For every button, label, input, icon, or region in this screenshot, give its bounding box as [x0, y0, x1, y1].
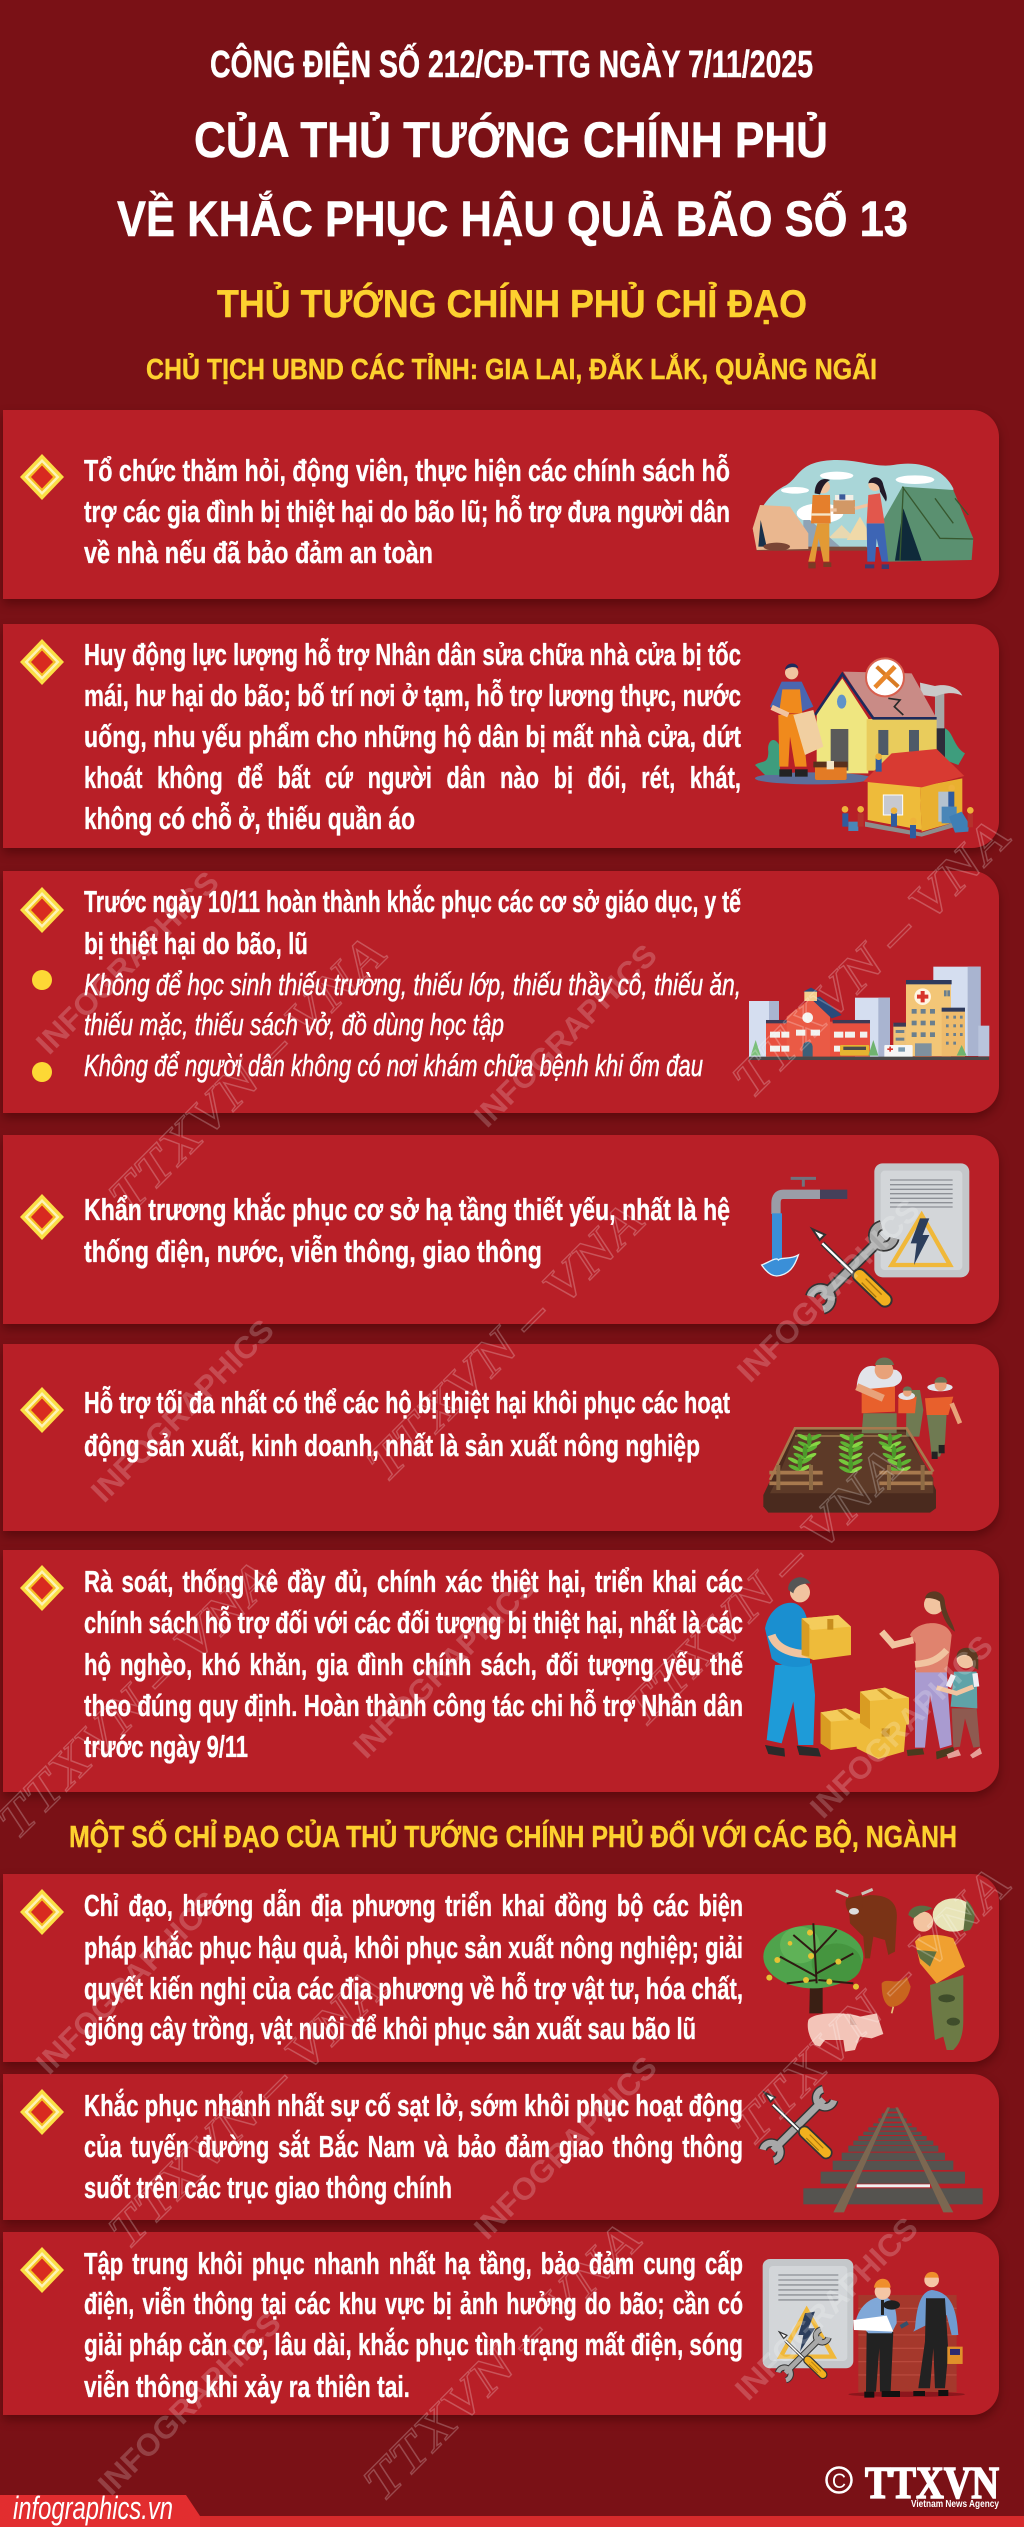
icon: tools and railway track [763, 2089, 983, 2212]
panel background [3, 410, 999, 599]
title line: storm recovery: VỀ KHẮC PHỤC HẬU QUẢ BÃO SỐ 13 [117, 190, 908, 247]
watermarks: TTXVN – VNA [351, 2210, 652, 2511]
text block: Không để người dân không có nơi khám chữa bệnh khi ốm đau [84, 1048, 703, 1083]
panel background [3, 624, 999, 848]
icon: soldiers and crop field [763, 1357, 960, 1513]
watermarks: INFOGRAPHICS [84, 1312, 281, 1509]
logo wordmark: TTXVN [865, 2457, 999, 2508]
watermarks: INFOGRAPHICS [346, 1568, 543, 1765]
panel background [3, 2232, 999, 2415]
title line: prime minister: CỦA THỦ TƯỚNG CHÍNH PHỦ [194, 111, 828, 168]
icon: relief worker, family and boxes [765, 1577, 982, 1759]
text block: trợ các gia đình bị thiệt hại do bão lũ; hỗ trợ đưa người dân [84, 494, 730, 529]
icon: diamond bullet [20, 1387, 64, 1433]
watermarks: TTXVN – VNA [96, 1958, 397, 2259]
icon: copyright circle: C [832, 2470, 846, 2493]
text block: suốt trên các trục giao thông chính [84, 2170, 452, 2205]
text block: về nhà nếu đã bảo đảm an toàn [84, 535, 433, 570]
text block: viễn thông khi xảy ra thiên tai. [84, 2369, 410, 2404]
text block: giải pháp căn cơ, lâu dài, khắc phục tình trạng mất điện, sóng [84, 2326, 743, 2362]
panel background [3, 1135, 999, 1324]
text block [84, 1564, 744, 1764]
panel: review damage and support payments [3, 1550, 999, 1792]
text block: Tổ chức thăm hỏi, động viên, thực hiện các chính sách hỗ [84, 453, 730, 488]
watermarks: TTXVN – VNA [720, 1855, 1021, 2156]
icon: tap, tools and electric box [762, 1163, 969, 1309]
text block [84, 1191, 730, 1269]
text block: trước ngày 9/11 [84, 1729, 248, 1764]
text block: của tuyến đường sắt Bắc Nam và bảo đảm giao thông thông [84, 2128, 743, 2164]
text block: chính sách hỗ trợ đối với các đối tượng bị thiệt hại, nhất là các [84, 1605, 743, 1640]
watermarks: INFOGRAPHICS [467, 937, 664, 1134]
watermarks: INFOGRAPHICS [730, 1192, 927, 1389]
text block [84, 637, 741, 836]
text block: quyết kiến nghị của các địa phương về hỗ trợ vật tư, hóa chất, [84, 1971, 743, 2006]
text block: bị thiệt hại do bão, lũ [84, 926, 308, 961]
panel background [3, 1344, 999, 1531]
watermarks: TTXVN – VNA [612, 1436, 913, 1737]
subheading: provincial chairmen: CHỦ TỊCH UBND CÁC TỈNH: GIA LAI, ĐẮK LẮK, QUẢNG NGÃI [146, 352, 877, 386]
panel background [3, 2074, 999, 2220]
text block: pháp khắc phục hậu quả, khôi phục sản xuất nông nghiệp; giải [84, 1929, 743, 1965]
header [117, 41, 908, 386]
watermarks: INFOGRAPHICS [29, 864, 226, 1061]
text block: Trước ngày 10/11 hoàn thành khắc phục các cơ sở giáo dục, y tế [84, 883, 742, 919]
title line: decree number: CÔNG ĐIỆN SỐ 212/CĐ-TTG NGÀY 7/11/2025 [210, 41, 813, 86]
text block: Rà soát, thống kê đầy đủ, chính xác thiệt hại, triển khai các [84, 1564, 743, 1599]
icon: diamond bullet [20, 2089, 64, 2135]
icon: yellow dot [32, 970, 52, 990]
panel: schools and clinics before 10/11 [3, 871, 999, 1113]
panel: power and telecom infrastructure [3, 2232, 999, 2415]
text block: theo đúng quy định. Hoàn thành công tác chi hỗ trợ Nhân dân [84, 1688, 743, 1723]
text block: uống, nhu yếu phẩm cho những hộ dân bị mất nhà cửa, dứt [84, 719, 741, 754]
text block: khoát không để bất cứ người dân nào bị đói, rét, khát, [84, 760, 741, 795]
red strip [0, 2516, 1024, 2527]
panel: visit and support families [3, 410, 999, 599]
subheading: prime minister directs: THỦ TƯỚNG CHÍNH PHỦ CHỈ ĐẠO [217, 282, 807, 326]
watermarks: TTXVN – VNA [96, 924, 397, 1225]
text block: mái, hư hại do bão; bố trí nơi ở tạm, hỗ trợ lương thực, nước [84, 678, 741, 713]
icon: yellow dot [32, 1062, 52, 1082]
icon: copyright circle [826, 2468, 852, 2493]
icon: tree, livestock and soldier [763, 1889, 975, 2052]
icon: diamond bullet [20, 1889, 64, 1935]
footer bar [0, 2490, 1024, 2527]
text block [84, 2246, 743, 2404]
icon: diamond bullet [20, 2247, 64, 2293]
text block [84, 1888, 743, 2046]
watermarks: INFOGRAPHICS [91, 2305, 288, 2502]
watermarks: INFOGRAPHICS [803, 1628, 1000, 1825]
watermarks: INFOGRAPHICS [728, 2210, 925, 2407]
text block: Huy động lực lượng hỗ trợ Nhân dân sửa chữa nhà cửa bị tốc [84, 637, 741, 672]
icon: relief workers and tents [753, 460, 973, 569]
panel: railway recovery [3, 2074, 999, 2220]
text block: động sản xuất, kinh doanh, nhất là sản xuất nông nghiệp [84, 1428, 700, 1463]
icon: diamond bullet [20, 639, 64, 685]
text block: hộ nghèo, khó khăn, gia đình chính sách, đối tượng yếu thế [84, 1647, 744, 1682]
icon: diamond bullet [20, 1194, 64, 1240]
panel background [3, 1550, 999, 1792]
icon: diamond bullet [20, 887, 64, 933]
text block [84, 453, 730, 570]
icon: electric box and engineers [763, 2259, 965, 2398]
logo tagline: Vietnam News Agency [911, 2499, 999, 2510]
panel: agricultural recovery guidance [3, 1874, 999, 2062]
text block: Hỗ trợ tối đa nhất có thể các hộ bị thiệt hại khôi phục các hoạt [84, 1385, 730, 1420]
text block [84, 883, 742, 1083]
watermarks: TTXVN – VNA [354, 1191, 655, 1492]
icon: school and hospital [749, 967, 989, 1060]
watermarks: TTXVN – VNA [720, 807, 1021, 1108]
text block: Chỉ đạo, hướng dẫn địa phương triển khai đồng bộ các biện [84, 1888, 743, 1923]
website name: infographics.vn [13, 2490, 173, 2526]
text block: không có chỗ ở, thiếu quần áo [84, 801, 415, 836]
panel background [3, 871, 999, 1113]
text block [84, 1385, 730, 1463]
panel: restore production [3, 1344, 999, 1531]
panel: essential infrastructure [3, 1135, 999, 1324]
watermarks: INFOGRAPHICS [29, 1884, 226, 2081]
text block: Khắc phục nhanh nhất sự cố sạt lở, sớm khôi phục hoạt động [84, 2087, 743, 2123]
watermarks [0, 807, 1021, 2511]
watermarks: INFOGRAPHICS [467, 2049, 664, 2246]
text block: điện, viễn thông tại các khu vực bị ảnh hưởng do bão; cần có [84, 2286, 743, 2321]
text block: giống cây trồng, vật nuôi để khôi phục sản xuất sau bão lũ [84, 2011, 696, 2046]
logo: copyright and TTXVN [826, 2457, 999, 2510]
text block: thiếu mặc, thiếu sách vở, đồ dùng học tập [84, 1007, 504, 1042]
panel background [3, 1874, 999, 2062]
icon: house repair [755, 658, 974, 838]
text block: thống điện, nước, viễn thông, giao thông [84, 1234, 542, 1269]
icon: diamond bullet [20, 1565, 64, 1611]
icon: diamond bullet [20, 454, 64, 500]
website tab [0, 2495, 200, 2527]
text block: Khẩn trương khắc phục cơ sở hạ tầng thiết yếu, nhất là hệ [84, 1191, 730, 1227]
text block: Tập trung khôi phục nhanh nhất hạ tầng, bảo đảm cung cấp [84, 2246, 743, 2281]
text block [84, 2087, 743, 2205]
text block: Không để học sinh thiếu trường, thiếu lớp, thiếu thầy cô, thiếu ăn, [84, 967, 741, 1002]
panel: mobilise forces to repair homes [3, 624, 999, 848]
